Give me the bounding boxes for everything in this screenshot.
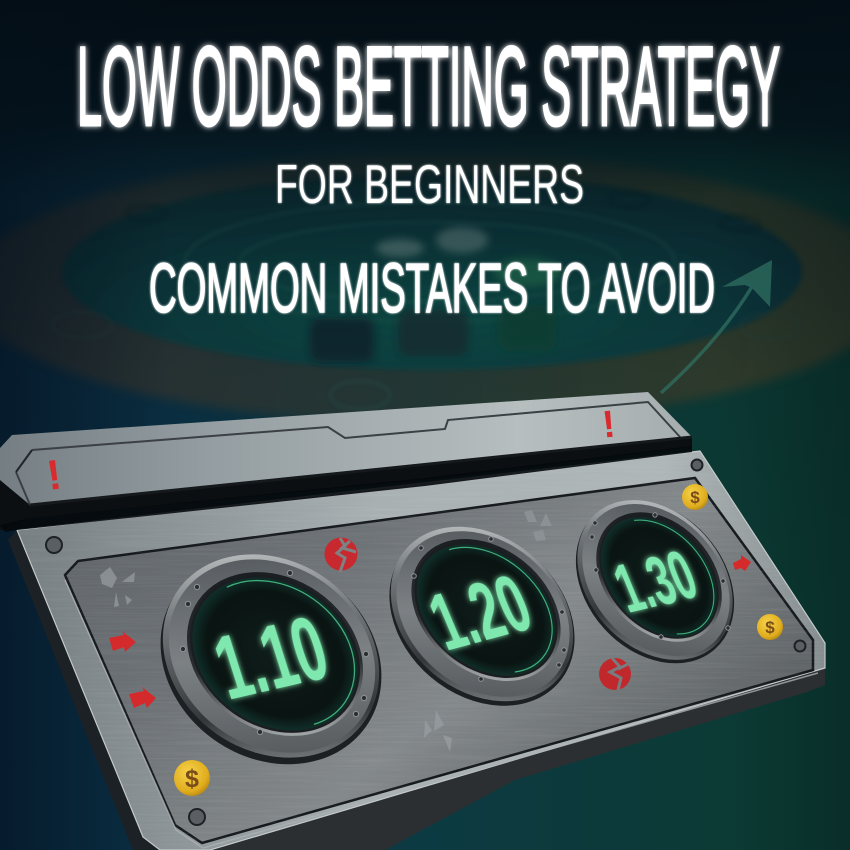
icon: grey shards left <box>100 567 135 607</box>
icon: grey shards centre <box>524 510 552 541</box>
icon: gold coin lower right: $ <box>765 618 775 637</box>
gauge: 1.10 <box>120 513 422 807</box>
console face <box>17 451 825 850</box>
poker table rim <box>0 153 850 423</box>
bar inset line <box>16 402 680 505</box>
gauge bolts <box>590 513 730 639</box>
icon: red arrow lower left <box>129 687 156 708</box>
gauge: 1.20 <box>354 491 610 742</box>
icon: grey shards bottom <box>424 710 452 752</box>
icon: red arrow right <box>733 555 751 571</box>
chip stacks <box>310 227 562 362</box>
console side shadow <box>8 530 165 850</box>
betting area markings <box>52 193 800 409</box>
warning mark left: ! <box>44 450 64 499</box>
bar shadow <box>0 437 692 530</box>
icon: broken red chip lower <box>599 658 631 690</box>
icon: gold coin upper right: $ <box>690 488 700 507</box>
reading: 1.10: 1.10 <box>203 598 339 719</box>
top and side vignette <box>0 0 850 620</box>
icon: broken red chip upper <box>324 538 358 572</box>
inset plate <box>65 478 813 843</box>
bar face <box>0 392 692 505</box>
rivets <box>46 460 806 825</box>
icon: red arrow upper left <box>109 631 136 652</box>
reading: 1.20: 1.20 <box>416 557 544 668</box>
gauge: 1.30 <box>544 469 766 695</box>
poker table felt <box>62 174 802 370</box>
panel: upper metal bar <box>0 392 692 532</box>
warning mark right: ! <box>600 404 617 447</box>
icon: gold coin large: $ <box>185 765 199 793</box>
subtitle: FOR BEGINNERS <box>275 153 584 215</box>
icon: gold coin upper right <box>682 484 708 510</box>
icon: gold coin lower right <box>757 614 783 640</box>
panel: lower metal console <box>0 440 850 850</box>
reading: 1.30: 1.30 <box>604 536 708 628</box>
icon: gold coin large <box>174 760 210 796</box>
brushed metal texture <box>64 484 814 844</box>
gauge bolts <box>412 537 566 681</box>
gauge bolts <box>180 570 369 735</box>
rising trend arrow <box>661 260 772 393</box>
